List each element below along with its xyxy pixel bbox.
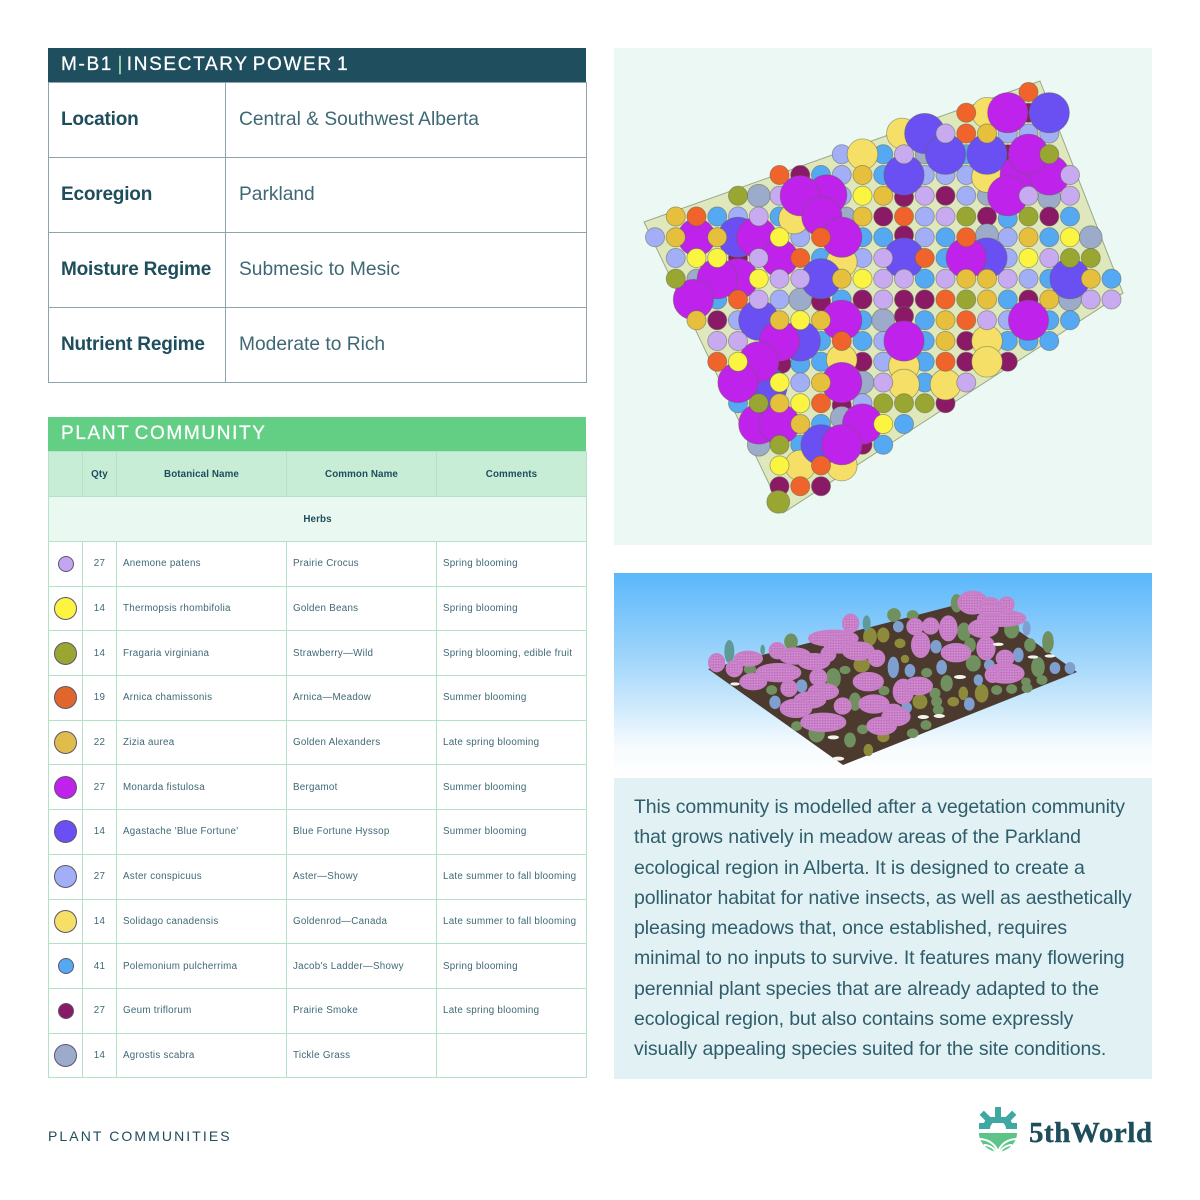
site attributes table: Submesic to Mesic bbox=[239, 259, 400, 280]
heading: plant community: PLANT COMMUNITY bbox=[61, 423, 267, 444]
panel: planting plan bbox=[614, 48, 1152, 545]
plant community table: Thermopsis rhombifolia bbox=[123, 603, 231, 614]
plant community table: Blue Fortune Hyssop bbox=[293, 826, 390, 837]
plant community table: Solidago canadensis bbox=[123, 916, 219, 927]
plant community table: Summer blooming bbox=[443, 826, 527, 837]
description text: ecological region, but also contains some expressly bbox=[634, 1008, 1073, 1030]
plant community table: Monarda fistulosa bbox=[123, 782, 205, 793]
description text: pleasing meadows that, once established, requires bbox=[634, 917, 1067, 939]
plant community table: Golden Alexanders bbox=[293, 737, 380, 748]
plant community table: Strawberry—Wild bbox=[293, 648, 373, 659]
plant community table: 19 bbox=[94, 692, 105, 703]
soil bed bbox=[708, 600, 1077, 765]
icon: 5thWorld logo mark bbox=[979, 1107, 1017, 1152]
plant community table: Tickle Grass bbox=[293, 1050, 350, 1061]
plant community table: Botanical Name bbox=[164, 468, 239, 480]
plant community table: Qty bbox=[91, 468, 108, 480]
description text: that grows natively in meadow areas of the Parkland bbox=[634, 826, 1081, 848]
yellow-green foliage bbox=[854, 628, 988, 755]
plant community table: 14 bbox=[94, 603, 105, 614]
description text: pollinator habitat for native insects, as well as aesthetically bbox=[634, 887, 1132, 909]
description text: visually appealing species suited for the site conditions. bbox=[634, 1038, 1106, 1060]
description text: minimal to no inputs to survive. It features many flowering bbox=[634, 947, 1124, 969]
large hyssop symbols bbox=[718, 93, 1090, 465]
plant community table bbox=[48, 451, 587, 1078]
white flowers bbox=[730, 643, 1055, 761]
blue spires bbox=[770, 622, 1075, 713]
plant community table: Prairie Smoke bbox=[293, 1005, 358, 1016]
plant community table: 27 bbox=[94, 558, 105, 569]
plant community table: Agastache 'Blue Fortune' bbox=[123, 826, 238, 837]
plant community table: Fragaria virginiana bbox=[123, 648, 209, 659]
footer label: PLANT COMMUNITIES bbox=[48, 1128, 232, 1144]
heading: plant community bbox=[48, 417, 586, 451]
plant community table: 41 bbox=[94, 961, 105, 972]
plant community table: Spring blooming bbox=[443, 603, 518, 614]
plant community table: Prairie Crocus bbox=[293, 558, 359, 569]
large bergamot symbols bbox=[673, 93, 1069, 465]
planting bed bbox=[644, 81, 1123, 513]
plant community table: Aster—Showy bbox=[293, 871, 358, 882]
plant community table: Late summer to fall blooming bbox=[443, 916, 576, 927]
plant community table: Arnica—Meadow bbox=[293, 692, 371, 703]
plant community table: Jacob's Ladder—Showy bbox=[293, 961, 404, 972]
site attributes table: Location bbox=[61, 109, 139, 130]
plant community table: Spring blooming, edible fruit bbox=[443, 648, 572, 659]
site attributes table bbox=[48, 82, 587, 383]
pink phlox clusters bbox=[709, 592, 1025, 734]
site attributes table: Moderate to Rich bbox=[239, 334, 385, 355]
site attributes table: Nutrient Regime bbox=[61, 334, 205, 355]
plant community table: 14 bbox=[94, 1050, 105, 1061]
description text: perennial plant species that are already adapted to the bbox=[634, 978, 1099, 1000]
panel: community description bbox=[614, 778, 1152, 1079]
plant community table: Spring blooming bbox=[443, 961, 518, 972]
plant community table: 14 bbox=[94, 648, 105, 659]
plant community table: 22 bbox=[94, 737, 105, 748]
plant community table: Anemone patens bbox=[123, 558, 201, 569]
plant community table: 14 bbox=[94, 826, 105, 837]
plant community table: Aster conspicuus bbox=[123, 871, 202, 882]
plant community table: Common Name bbox=[325, 468, 398, 480]
plant community table: Zizia aurea bbox=[123, 737, 174, 748]
teal spires bbox=[724, 615, 871, 663]
title bar: M-B1 Insectary Power 1: M-B1 | INSECTARY POWER 1 bbox=[61, 54, 349, 75]
plant community table: Agrostis scabra bbox=[123, 1050, 195, 1061]
plant community table: Herbs bbox=[303, 514, 332, 524]
plant community table: Bergamot bbox=[293, 782, 338, 793]
plant community table: Golden Beans bbox=[293, 603, 358, 614]
panel: 3D meadow rendering bbox=[614, 573, 1152, 765]
plant community table: Late summer to fall blooming bbox=[443, 871, 576, 882]
site attributes table: Moisture Regime bbox=[61, 259, 211, 280]
large goldenrod symbols bbox=[779, 97, 1002, 481]
description text: ecological region in Alberta. It is designed to create a bbox=[634, 856, 1085, 878]
plant symbols grid bbox=[645, 103, 1121, 496]
plant community table: Polemonium pulcherrima bbox=[123, 961, 237, 972]
site attributes table: Central & Southwest Alberta bbox=[239, 109, 479, 130]
plant community table: Arnica chamissonis bbox=[123, 692, 212, 703]
plant community table: Spring blooming bbox=[443, 558, 518, 569]
plant community table: 27 bbox=[94, 871, 105, 882]
plant community table: 27 bbox=[94, 782, 105, 793]
plant community table: Summer blooming bbox=[443, 692, 527, 703]
site attributes table: Parkland bbox=[239, 184, 315, 205]
plant community table: Late spring blooming bbox=[443, 737, 539, 748]
plant community table: Summer blooming bbox=[443, 782, 527, 793]
plant community table: Late spring blooming bbox=[443, 1005, 539, 1016]
description text bbox=[634, 796, 1132, 1060]
description text: This community is modelled after a vegetation community bbox=[634, 796, 1125, 818]
title bar: M-B1 Insectary Power 1 bbox=[48, 48, 586, 82]
plants bbox=[709, 592, 1075, 761]
plant community table: 27 bbox=[94, 1005, 105, 1016]
logo wordmark: 5thWorld bbox=[1029, 1117, 1153, 1149]
plant community table: Geum triflorum bbox=[123, 1005, 192, 1016]
green foliage bbox=[745, 595, 1053, 747]
plant community table: Comments bbox=[486, 468, 537, 480]
small symbols above large symbols bbox=[666, 82, 1121, 513]
plant community table: 14 bbox=[94, 916, 105, 927]
site attributes table: Ecoregion bbox=[61, 184, 152, 205]
plant community table: Goldenrod—Canada bbox=[293, 916, 387, 927]
